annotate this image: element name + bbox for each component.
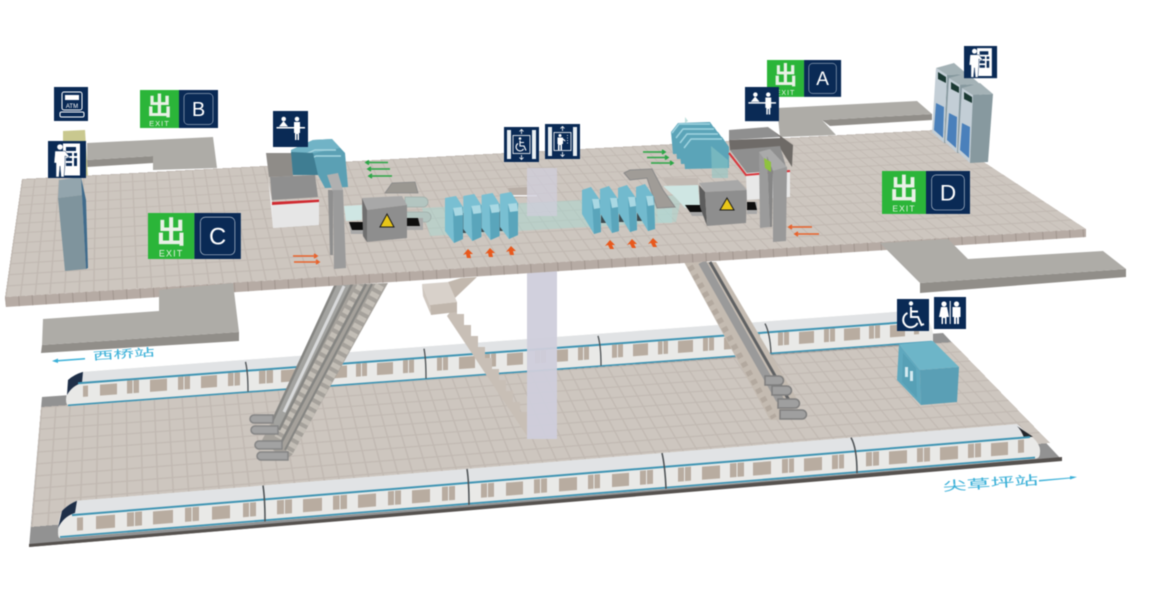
left ticket gates: [445, 192, 518, 243]
exit passage C: [41, 283, 239, 353]
right ticket gates: [582, 184, 655, 234]
concourse front edge: [5, 229, 1086, 307]
icon: toilets: [934, 297, 966, 329]
exit sign D: D: [940, 180, 956, 205]
exit sign C: EXIT: [159, 248, 184, 259]
green arrows right: [643, 150, 673, 165]
icon: hazard triangle: [380, 214, 394, 227]
icon: service desk left: [273, 111, 308, 147]
right escalator top on concourse: [624, 169, 675, 208]
upper level scene: [4, 45, 1127, 492]
exit sign B: EXIT: [149, 119, 170, 128]
red arrows left: [293, 254, 319, 264]
left blue machines: [291, 139, 348, 188]
exit sign A: A: [816, 69, 829, 90]
arrow right: [1039, 476, 1077, 482]
label: Jiancaoping station: [942, 473, 1077, 494]
exit sign D: EXIT: [892, 204, 916, 214]
left ticket machine: [58, 177, 88, 271]
exit sign C: C: [209, 223, 226, 251]
left walk-through detector: [327, 173, 346, 269]
lift shaft lower section: [527, 270, 557, 439]
exit sign D: [882, 171, 970, 214]
green display: [764, 158, 771, 172]
icon: ticket machine left: [48, 141, 86, 178]
icon: ticket machine right: [964, 46, 997, 78]
icon: service desk right: [745, 87, 779, 121]
exit passage B: [87, 137, 217, 170]
green arrows left: [366, 160, 392, 178]
exit sign A: EXIT: [776, 88, 795, 97]
right blue machines: [671, 117, 729, 178]
lower platform tiled floor: [31, 342, 1050, 527]
icon: hazard triangle: [720, 198, 734, 210]
exit sign C: 出: [156, 217, 186, 250]
exit passage A: [777, 101, 932, 137]
exit sign B: B: [192, 99, 205, 121]
icon: accessible lift: [504, 127, 539, 162]
right walk-through detector: [759, 149, 787, 242]
up arrows at gates: [463, 238, 658, 258]
label: Jiancaoping station: 尖草坪站: [942, 473, 1039, 494]
exit sign B: [140, 90, 218, 128]
exit sign B: 出: [147, 93, 172, 121]
exit sign C: [148, 213, 241, 259]
red arrows right: [789, 225, 819, 236]
right ticket machines: [932, 63, 993, 163]
yellow wall behind left ticket machines: [63, 130, 90, 208]
upper concourse tiled floor: [5, 130, 1086, 297]
arrow left: [52, 358, 85, 363]
stair opening: [508, 187, 537, 198]
icon: ATM: ATM: [66, 104, 78, 110]
icon: lift: [545, 124, 580, 159]
right service booth: [728, 127, 793, 200]
exit sign A: [767, 60, 841, 97]
toilet block: [897, 341, 959, 405]
left escalator top on concourse: [385, 182, 431, 222]
centre staircase: [422, 277, 527, 436]
left service booth: [266, 153, 319, 228]
icon: ATM: [54, 87, 88, 121]
flow arrows: [293, 150, 819, 264]
paid area translucent band: [344, 178, 700, 236]
icon: wheelchair: [897, 299, 929, 331]
exit sign D: 出: [890, 173, 918, 205]
right escalators: [684, 262, 806, 420]
front train: [58, 422, 1040, 538]
right x-ray machine: [685, 180, 757, 226]
back train: [66, 309, 933, 406]
left escalators: [250, 283, 388, 460]
exit passage D: [880, 239, 1126, 293]
label: Xiqiao station: 西桥站: [92, 346, 155, 363]
left x-ray machine: [349, 196, 423, 242]
label: Xiqiao station: [52, 346, 155, 363]
exit sign A: 出: [774, 63, 797, 90]
lift shaft upper section: [527, 168, 557, 216]
